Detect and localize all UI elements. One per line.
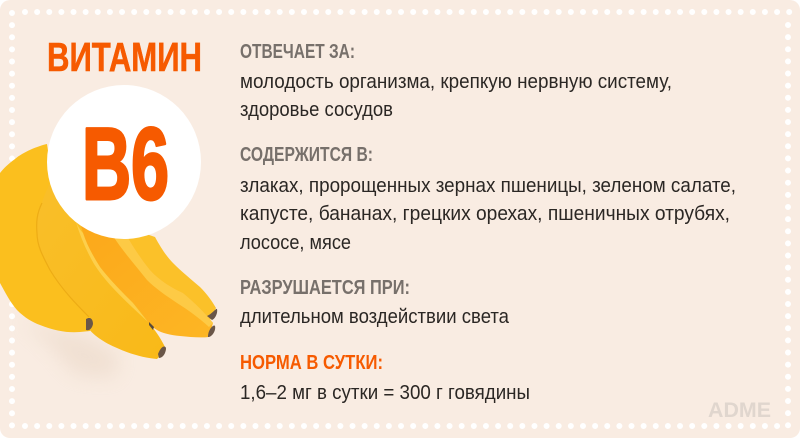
body text — [240, 175, 736, 254]
banana 4 (rear) — [120, 225, 216, 320]
crease between bananas — [37, 203, 89, 317]
banana stems — [86, 309, 217, 358]
B6 label: В6 — [82, 107, 169, 221]
banana 3 — [78, 225, 213, 337]
banana 3 highlight — [113, 236, 213, 327]
body text: капусте, бананах, грецких орехах, пшеничных отрубях, — [240, 203, 730, 225]
section: contained in — [240, 144, 736, 254]
body text: злаках, пророщенных зернах пшеницы, зеленом салате, — [240, 175, 736, 197]
body text: молодость организма, крепкую нервную систему, — [240, 71, 672, 93]
heading: НОРМА В СУТКИ: — [240, 352, 383, 374]
heading: РАЗРУШАЕТСЯ ПРИ: — [240, 277, 410, 299]
heading: ОТВЕЧАЕТ ЗА: — [240, 41, 355, 63]
banana 2 ridge — [76, 222, 148, 322]
banana 2 — [34, 178, 166, 359]
section: responsible for — [240, 41, 672, 121]
icon: banana bunch — [0, 144, 217, 378]
section: daily norm — [240, 352, 530, 404]
vitamin heading: ВИТАМИН — [47, 34, 202, 80]
watermark: ADME — [708, 399, 771, 422]
section: destroyed by — [240, 277, 510, 328]
body text: лососе, мясе — [240, 232, 351, 254]
body text: 1,6–2 мг в сутки = 300 г говядины — [240, 382, 530, 404]
banana 1 (front left) — [0, 144, 90, 332]
heading: СОДЕРЖИТСЯ В: — [240, 144, 373, 166]
body text: здоровье сосудов — [240, 99, 393, 121]
body text: длительном воздействии света — [240, 306, 510, 328]
white circle badge — [47, 85, 201, 239]
body text — [240, 71, 672, 121]
